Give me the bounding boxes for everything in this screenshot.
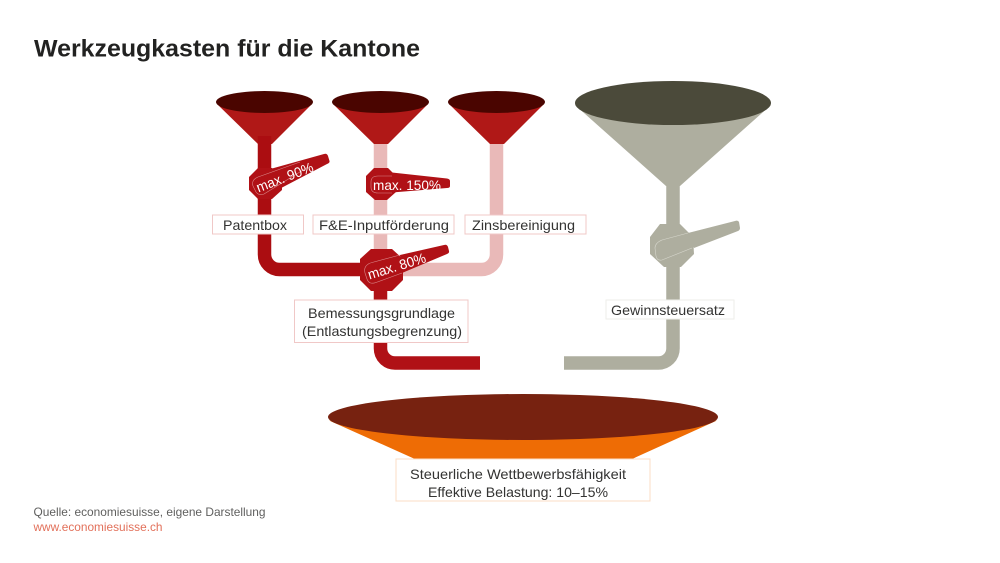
- valve: max. 80%: [360, 245, 449, 291]
- source note: Quelle: economiesuisse, eigene Darstellung: [34, 505, 266, 519]
- valve: Gewinnsteuersatz: [650, 221, 740, 267]
- label: Zinsbereinigung: Zinsbereinigung: [472, 217, 575, 233]
- label: F&E-Inputförderung: F&E-Inputförderung: [319, 217, 449, 233]
- label: Patentbox: Patentbox: [223, 217, 287, 233]
- pipe: F&E to valve: [374, 143, 387, 270]
- funnel: Zinsbereinigung: [448, 91, 545, 144]
- funnel: Patentbox: [216, 91, 313, 144]
- pipe: Patentbox to valve: [264, 136, 381, 270]
- label: Bemessungsgrundlage: (Entlastungsbegrenzung): [302, 323, 462, 339]
- pipe: output to bottom funnel: [380, 270, 480, 363]
- funnel: Steuerliche Wettbewerbsfähigkeit: [328, 394, 718, 460]
- valve: max. 90%: max. 90%: [254, 159, 316, 195]
- pipe: Zinsbereinigung to valve: [381, 143, 496, 270]
- label: Bemessungsgrundlage: [294, 300, 468, 342]
- title: Werkzeugkasten für die Kantone: [34, 36, 420, 62]
- valve: max. 150%: [366, 168, 450, 200]
- funnel: Gewinnsteuersatz: [575, 81, 771, 186]
- website link: www.economiesuisse.ch: [33, 520, 162, 534]
- label: Gewinnsteuersatz: Gewinnsteuersatz: [611, 302, 725, 318]
- label: Steuerliche Wettbewerbsfähigkeit: Steuerliche Wettbewerbsfähigkeit: [410, 466, 626, 482]
- pipe: Gewinnsteuersatz: [564, 180, 673, 363]
- funnel: F&E-Inputförderung: [332, 91, 429, 144]
- label: Bemessungsgrundlage: Bemessungsgrundlage: [308, 305, 455, 321]
- label: Patentbox: [212, 215, 304, 234]
- valve: max. 90%: [249, 154, 330, 199]
- label: Zinsbereinigung: [465, 215, 586, 234]
- valve: max. 150%: max. 150%: [373, 177, 441, 193]
- label: Steuerliche Wettbewerbsfähigkeit: Effektive Belastung: 10–15%: [428, 484, 608, 500]
- valve: max. 80%: max. 80%: [366, 250, 428, 282]
- label: Steuerliche Wettbewerbsfähigkeit: [396, 459, 650, 501]
